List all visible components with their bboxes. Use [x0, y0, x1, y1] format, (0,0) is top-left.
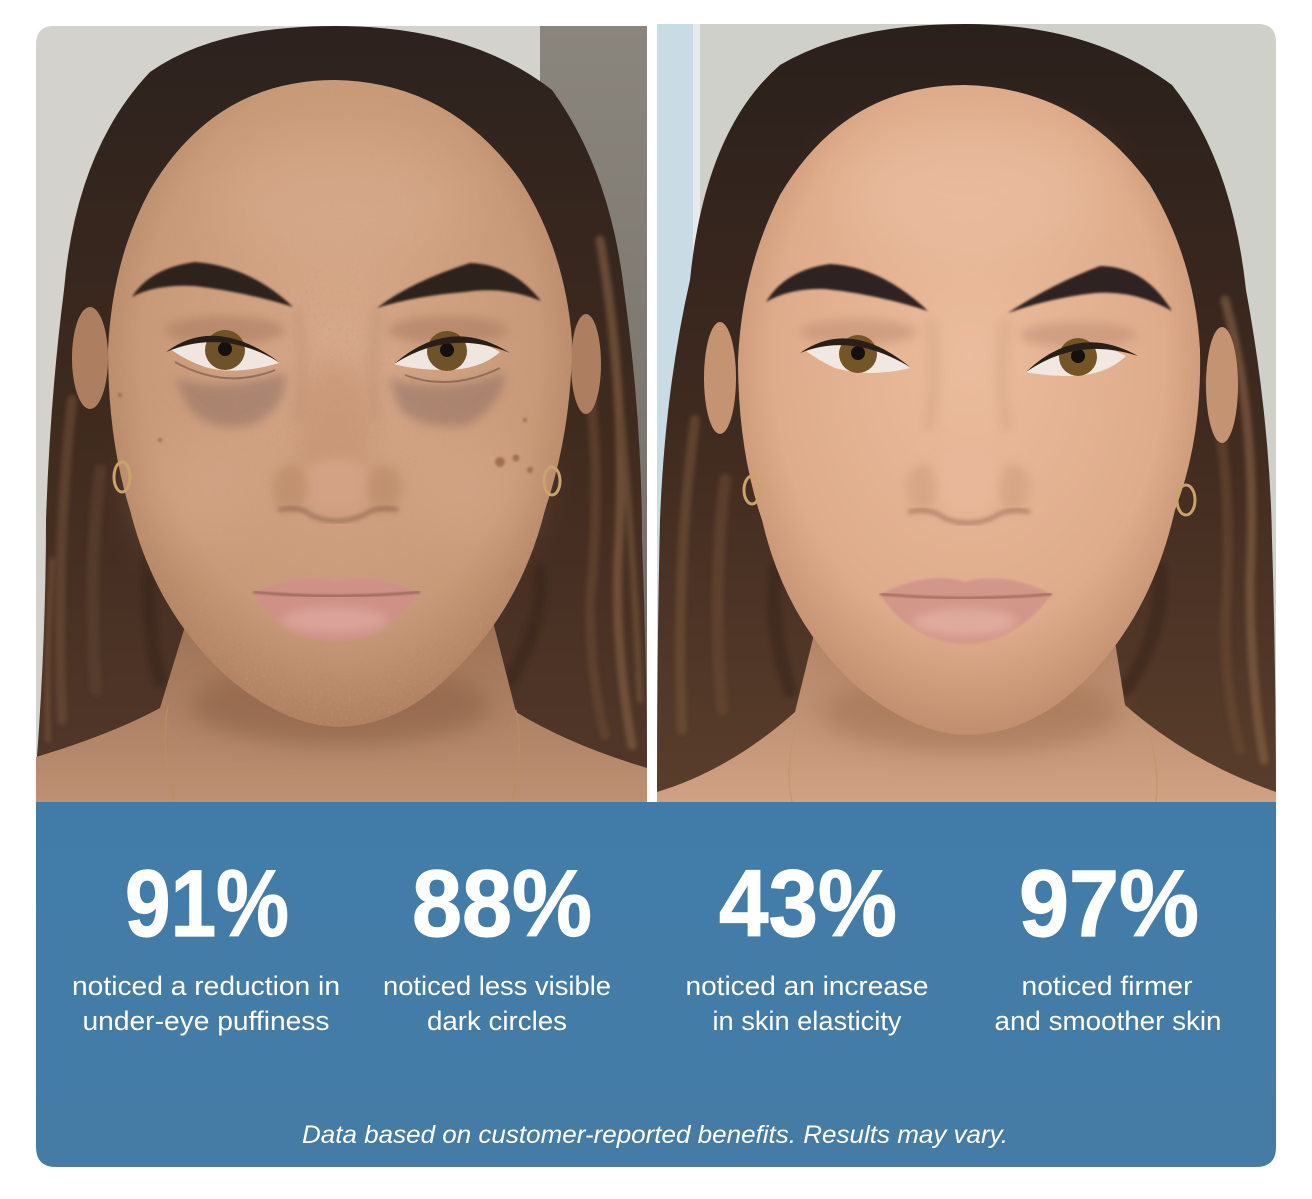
- earrings: [744, 476, 1195, 515]
- eye socket shadows: [800, 319, 1136, 430]
- stat: 43 percent: [686, 851, 928, 1036]
- background wall: [36, 26, 647, 802]
- stat: 97 percent: noticed firmer: [1022, 971, 1193, 1001]
- stat: 91 percent: 91%: [125, 851, 289, 957]
- hair strands: [48, 240, 640, 745]
- stat: 91 percent: noticed a reduction in: [72, 971, 340, 1001]
- left eye: [800, 335, 910, 373]
- stat: 88 percent: [383, 851, 611, 1036]
- right eye: [394, 331, 510, 382]
- nose: [906, 466, 1032, 526]
- nose: [272, 360, 402, 521]
- hair strands: [680, 300, 1264, 760]
- panel: statistics: [36, 802, 1276, 1167]
- lips: [880, 578, 1052, 644]
- photo: before, tired skin with under-eye circles: [36, 26, 647, 802]
- background wall and window: [657, 24, 1276, 802]
- lips: [253, 579, 420, 642]
- hair: [36, 26, 647, 802]
- blemish spots: [118, 393, 533, 473]
- stat: 97 percent: 97%: [1019, 851, 1199, 957]
- necklace: [789, 730, 1157, 802]
- eye socket shadows: [167, 314, 506, 344]
- face shape: [108, 80, 572, 727]
- right eye: [1026, 338, 1138, 376]
- necklace: [165, 705, 519, 802]
- cheek tones: [122, 484, 137, 535]
- stat: 88 percent: noticed less visible: [383, 971, 611, 1001]
- stat: 97 percent: [994, 851, 1222, 1036]
- neck shadow under jaw: [190, 665, 490, 745]
- stat: 43 percent: noticed an increase: [686, 971, 928, 1001]
- stat: 43 percent: in skin elasticity: [712, 1006, 902, 1036]
- disclaimer: Data based on customer-reported benefits. Results may vary.: [302, 1121, 1008, 1149]
- hair: [657, 24, 1276, 802]
- shoulders and neck: [36, 610, 647, 802]
- under-eye dark circle right: [388, 372, 505, 427]
- stat: 91 percent: [72, 851, 340, 1036]
- shoulders and neck: [657, 637, 1276, 802]
- stat: 91 percent: under-eye puffiness: [82, 1006, 330, 1036]
- ears: [704, 322, 1238, 443]
- stat: 97 percent: and smoother skin: [994, 1006, 1222, 1036]
- ears: [72, 307, 601, 414]
- forehead glow: [867, 148, 1074, 222]
- photo: after, smooth skin: [657, 24, 1276, 802]
- stat: 88 percent: 88%: [412, 851, 592, 957]
- neck shadow under jaw: [822, 685, 1118, 757]
- freckle texture: [100, 80, 580, 730]
- eyebrows: [766, 264, 1172, 313]
- stat: 43 percent: 43%: [719, 851, 897, 957]
- under-eye dark circle left: [174, 372, 286, 427]
- left eye: [166, 330, 279, 378]
- stat: 88 percent: dark circles: [427, 1006, 567, 1036]
- forehead light: [210, 140, 470, 260]
- face shape: [738, 85, 1200, 735]
- earrings: [114, 462, 560, 495]
- eyebrows: [132, 262, 541, 308]
